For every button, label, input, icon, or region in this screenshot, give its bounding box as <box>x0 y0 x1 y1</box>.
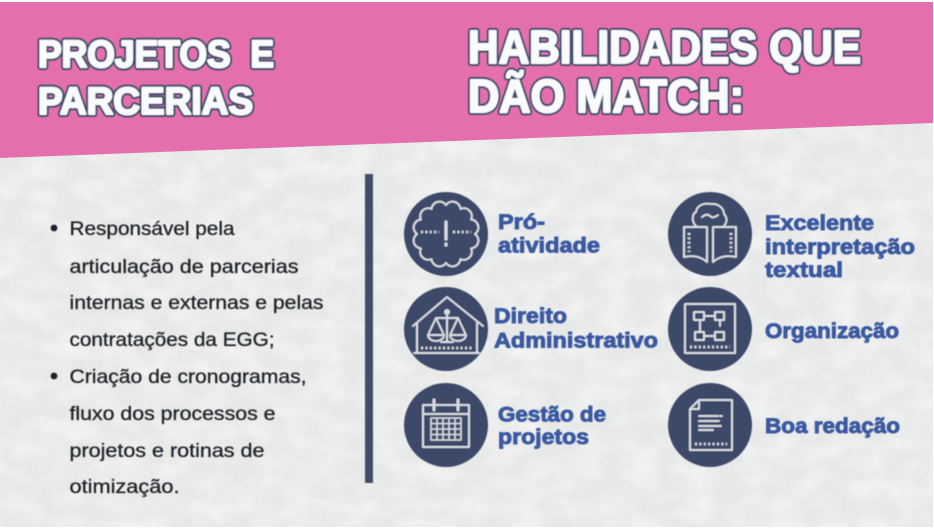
heading: projetos e parcerias: PROJETOS E <box>38 34 274 76</box>
heading: projetos e parcerias: PARCERIAS <box>38 81 253 123</box>
heading: habilidades que dão match: HABILIDADES QUE <box>468 21 861 73</box>
label: excelente interpretação textual: Excelente <box>765 212 874 235</box>
label: gestão de projetos: Gestão de <box>498 404 606 426</box>
heading: projetos e parcerias: PARCERIAS <box>38 81 253 123</box>
label: excelente interpretação textual <box>765 212 915 282</box>
heading: habilidades que dão match: DÃO MATCH: <box>468 70 744 122</box>
label: direito administrativo <box>494 305 658 352</box>
bullet list: Responsável pela <box>70 218 235 240</box>
heading: projetos e parcerias <box>38 34 274 123</box>
label: pró-atividade: atividade <box>498 234 600 258</box>
heading: projetos e parcerias: PROJETOS E <box>38 34 274 76</box>
heading: habilidades que dão match: HABILIDADES QUE <box>468 21 861 73</box>
bullet list: projetos e rotinas de <box>70 440 264 462</box>
label: gestão de projetos <box>498 404 606 449</box>
vertical divider bar <box>365 174 373 483</box>
label: pró-atividade <box>498 211 600 258</box>
bullet list: Criação de cronogramas, <box>70 366 306 388</box>
label: direito administrativo: Direito <box>494 305 567 328</box>
label: excelente interpretação textual: interpretação <box>765 236 915 259</box>
icon: direito administrativo <box>404 287 488 371</box>
icon: pró-atividade <box>404 192 488 276</box>
label: organização: Organização <box>765 320 899 343</box>
bullet list: internas e externas e pelas <box>70 292 324 314</box>
label: boa redação: Boa redação <box>765 415 900 438</box>
icon: organização <box>668 287 752 371</box>
label: direito administrativo: Administrativo <box>494 330 658 352</box>
bullet list: articulação de parcerias <box>70 256 299 278</box>
icon: boa redação <box>668 383 752 467</box>
label: gestão de projetos: projetos <box>498 426 589 449</box>
pink header band <box>0 2 933 158</box>
bullet list <box>51 218 324 498</box>
bullet list: contratações da EGG; <box>70 329 274 351</box>
bullet list: fluxo dos processos e <box>70 403 276 425</box>
label: pró-atividade: Pró- <box>498 211 545 234</box>
label: excelente interpretação textual: textual <box>765 259 843 282</box>
bullet list: otimização. <box>70 476 180 498</box>
icon: interpretação textual <box>668 192 752 276</box>
icon: gestão de projetos <box>404 383 488 467</box>
heading: habilidades que dão match <box>468 21 861 122</box>
heading: habilidades que dão match: DÃO MATCH: <box>468 70 744 122</box>
